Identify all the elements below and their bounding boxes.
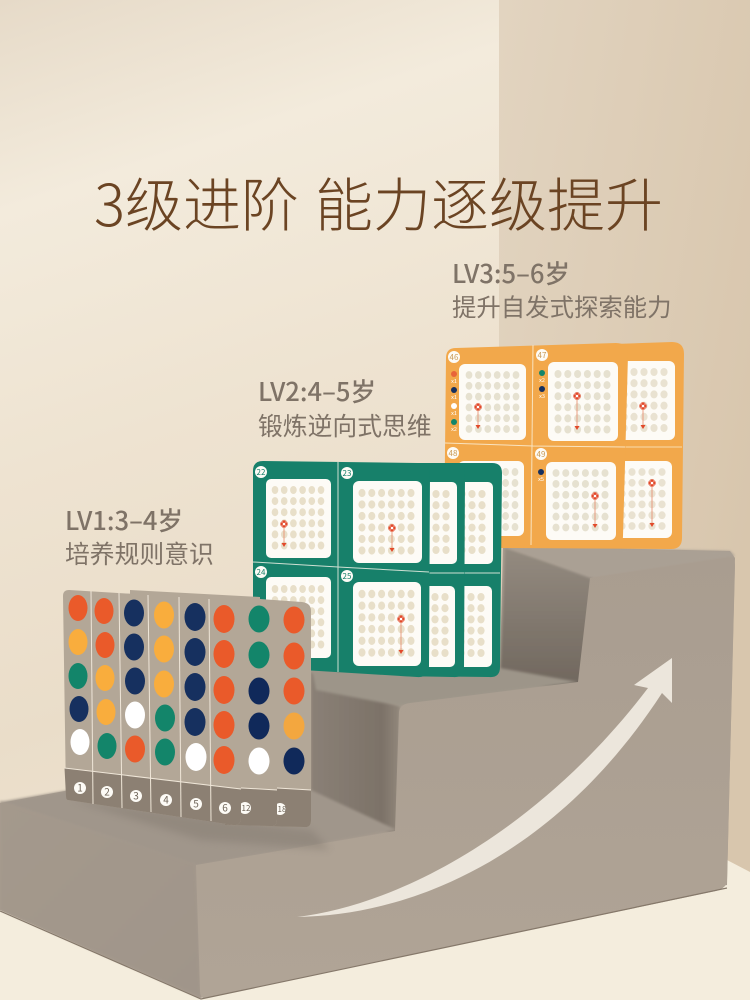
strip 4: 4 xyxy=(163,792,169,806)
puzzle 25: 25 xyxy=(343,571,351,582)
strip 2 xyxy=(94,598,116,798)
strip 6: 6 xyxy=(222,800,228,814)
puzzle 49 xyxy=(535,448,616,540)
label: level 2: 锻炼逆向式思维 xyxy=(258,407,432,443)
puzzle 49: x5 xyxy=(538,475,544,483)
front green card xyxy=(253,461,430,677)
puzzle 47 xyxy=(536,349,618,441)
front orange card xyxy=(444,343,628,548)
puzzle 23: 23 xyxy=(343,468,351,479)
puzzle 46: x1 xyxy=(451,409,457,417)
back orange card xyxy=(500,342,684,549)
strip 3 xyxy=(124,600,145,802)
label: level 2: LV2:4–5岁 xyxy=(258,372,376,409)
step 1 left face xyxy=(0,801,201,998)
card 12 xyxy=(225,598,277,826)
step 2 top xyxy=(311,664,578,706)
puzzle 49: 49 xyxy=(537,449,545,460)
title xyxy=(94,159,663,243)
orange card set: level 3 xyxy=(444,342,684,549)
card 18 xyxy=(260,599,311,827)
strip 5: 5 xyxy=(193,796,199,810)
floor contact edge xyxy=(0,888,727,999)
puzzle 46: x1 xyxy=(451,377,457,385)
label: level 1: LV1:3–4岁 xyxy=(65,501,183,538)
staircase block xyxy=(0,546,735,999)
puzzle 46: 46 xyxy=(450,352,459,363)
grey strip cards: level 1 xyxy=(63,590,330,850)
card shadow on step xyxy=(70,800,330,850)
puzzle 22 xyxy=(255,466,331,558)
label: level 3 xyxy=(452,254,672,324)
step 3 left side xyxy=(500,548,592,690)
step 1 top xyxy=(0,790,397,866)
strip 2: 2 xyxy=(104,784,110,798)
back card markers xyxy=(639,402,656,527)
card 18: 18 xyxy=(278,804,287,815)
puzzle 47: 47 xyxy=(538,350,547,361)
puzzle 25 xyxy=(341,570,421,666)
back card tops xyxy=(130,590,260,610)
third green card xyxy=(400,463,502,677)
strip 5 xyxy=(184,603,206,810)
label: level 3: LV3:5–6岁 xyxy=(452,254,570,291)
label: level 1: 培养规则意识 xyxy=(65,535,214,571)
puzzle 24 xyxy=(255,566,331,658)
puzzle 24: 24 xyxy=(257,567,266,578)
puzzle 47: x3 xyxy=(539,392,545,400)
step 3 top xyxy=(503,546,735,578)
label: level 2 xyxy=(258,372,432,443)
strip 1: 1 xyxy=(77,780,83,794)
label: level 3: 提升自发式探索能力 xyxy=(452,289,672,324)
strip 4 xyxy=(154,602,175,806)
step 2 left side xyxy=(311,672,400,835)
puzzle 46 xyxy=(448,351,526,440)
puzzle 47: x2 xyxy=(539,376,545,384)
strip 3: 3 xyxy=(133,788,139,802)
soft base silhouette xyxy=(0,546,735,998)
stair front face xyxy=(196,557,735,998)
card 12: 12 xyxy=(242,803,251,814)
label: level 1 xyxy=(65,501,214,571)
title: 3级进阶 xyxy=(94,159,299,243)
puzzle 23 xyxy=(341,467,422,563)
puzzle 22: 22 xyxy=(257,467,266,478)
strip 6 xyxy=(214,605,234,814)
title: 能力逐级提升 xyxy=(315,159,663,243)
puzzle 46: x1 xyxy=(451,393,457,401)
front cards 1 to 6 xyxy=(63,590,241,825)
arrow rising up the stairs xyxy=(297,658,672,917)
puzzle 48: 48 xyxy=(449,448,458,459)
puzzle 48 xyxy=(447,447,524,536)
strip 1 xyxy=(68,595,90,794)
green card set: level 2 xyxy=(253,461,502,677)
second green card xyxy=(391,463,465,677)
puzzle 46: x2 xyxy=(451,425,457,433)
